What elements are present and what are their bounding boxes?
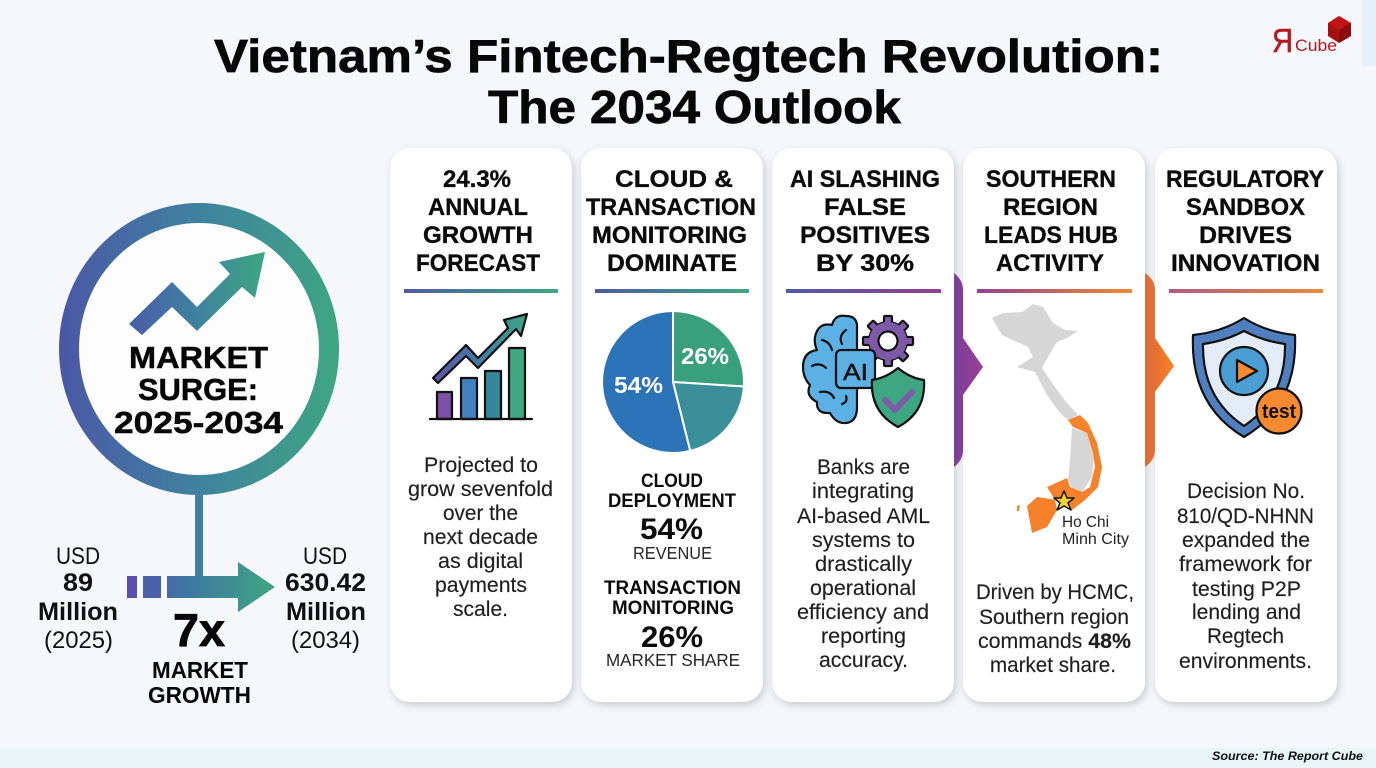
map: Vietnam: Ho Chi — [1062, 514, 1109, 531]
text: testing P2P — [1192, 578, 1301, 601]
panel: AI slashing false positives — [772, 148, 954, 702]
text: Decision No. — [1187, 480, 1305, 503]
end value: USD — [303, 543, 347, 570]
text: payments — [435, 574, 527, 597]
text: next decade — [423, 526, 538, 549]
text — [976, 581, 1134, 677]
transaction monitoring stat: MONITORING — [612, 598, 734, 619]
map: Vietnam: Minh City — [1062, 531, 1129, 548]
7x market growth — [148, 604, 251, 708]
cloud deployment stat: DEPLOYMENT — [608, 491, 736, 512]
heading: INNOVATION — [1171, 250, 1320, 277]
start value: USD — [56, 543, 100, 570]
heading: AI SLASHING — [790, 166, 940, 193]
arrow: orange tab — [1145, 273, 1174, 467]
text: 810/QD-NHNN — [1177, 505, 1314, 528]
text: commands 48% — [978, 630, 1131, 653]
start value — [38, 543, 118, 654]
heading: BY 30% — [816, 250, 914, 277]
text: scale. — [453, 598, 508, 621]
heading: ACTIVITY — [996, 250, 1104, 277]
icon: AI brain, gear and shield — [803, 316, 924, 427]
heading — [416, 166, 540, 277]
heading: REGION — [1003, 194, 1098, 221]
ring label — [114, 340, 284, 440]
heading: TRANSACTION — [586, 194, 756, 221]
text — [1177, 480, 1314, 673]
heading: FALSE — [824, 194, 906, 221]
map: Vietnam — [992, 304, 1129, 548]
heading: CLOUD & — [615, 166, 733, 193]
panel: market surge — [38, 213, 366, 708]
title: The 2034 Outlook — [488, 81, 901, 133]
cloud deployment stat: CLOUD — [641, 471, 703, 492]
text: AI-based AML — [797, 505, 930, 528]
heading — [790, 166, 940, 277]
text: framework for — [1179, 553, 1312, 576]
text: reporting — [821, 625, 906, 648]
7x market growth: 7x — [173, 604, 225, 656]
heading: DOMINATE — [607, 250, 737, 277]
title — [214, 30, 1163, 133]
logo: RCube: Cube — [1295, 36, 1337, 55]
heading: ANNUAL — [428, 194, 528, 221]
text: Projected to — [424, 454, 538, 477]
panel: southern region leads hub activity — [963, 148, 1145, 702]
text: market share. — [990, 654, 1116, 677]
heading: 24.3% — [443, 166, 511, 193]
text: accuracy. — [819, 649, 908, 672]
text: over the — [443, 502, 518, 525]
heading: FORECAST — [416, 250, 540, 277]
heading: DRIVES — [1199, 222, 1292, 249]
ring label: 2025-2034 — [114, 405, 284, 440]
pie chart: 54% — [614, 372, 663, 398]
panel: regulatory sandbox drives innovation — [1155, 148, 1337, 702]
ring label: SURGE: — [138, 372, 258, 407]
pie chart — [602, 311, 744, 453]
text: grow sevenfold — [408, 478, 553, 501]
panel: annual growth forecast — [390, 148, 572, 702]
text: operational — [810, 577, 916, 600]
start value: (2025) — [44, 627, 113, 654]
text: as digital — [438, 550, 523, 573]
text: Regtech — [1207, 625, 1284, 648]
cloud deployment stat: 54% — [640, 513, 703, 546]
text — [797, 456, 930, 672]
growth arrow — [127, 495, 275, 612]
title: Vietnam’s Fintech-Regtech Revolution: — [214, 30, 1163, 82]
heading — [984, 166, 1118, 277]
text: Banks are — [817, 456, 910, 479]
icon: AI brain, gear and shield: AI — [843, 359, 868, 385]
ring label: MARKET — [129, 340, 268, 375]
start value: 89 — [63, 569, 93, 597]
text: Southern region — [979, 606, 1129, 629]
logo: RCube — [1272, 16, 1351, 59]
text: expanded the — [1182, 529, 1310, 552]
heading: GROWTH — [423, 222, 533, 249]
text: efficiency and — [797, 601, 929, 624]
logo: RCube: Я — [1272, 22, 1293, 59]
heading: REGULATORY — [1166, 166, 1324, 193]
arrow: purple tab — [954, 273, 983, 467]
ring with trend arrow — [69, 213, 329, 485]
7x market growth: GROWTH — [148, 682, 251, 708]
icon: shield with test badge: test — [1262, 401, 1296, 423]
heading — [586, 166, 756, 277]
end value: Million — [286, 598, 366, 626]
cloud deployment stat: REVENUE — [633, 543, 712, 563]
transaction monitoring stat: TRANSACTION — [604, 578, 741, 599]
heading: SOUTHERN — [986, 166, 1116, 193]
start value: Million — [38, 598, 118, 626]
cloud deployment stat — [608, 471, 736, 563]
heading: POSITIVES — [800, 222, 930, 249]
transaction monitoring stat: 26% — [641, 621, 703, 654]
text: lending and — [1192, 601, 1301, 624]
transaction monitoring stat — [604, 578, 741, 670]
icon: bar chart with arrow — [430, 314, 532, 419]
source: Source: The Report Cube — [1212, 749, 1363, 763]
icon: shield with test badge — [1193, 318, 1302, 437]
text: systems to — [812, 529, 915, 552]
text: Driven by HCMC, — [976, 581, 1134, 604]
transaction monitoring stat: MARKET SHARE — [606, 650, 740, 670]
text — [408, 454, 553, 621]
7x market growth: MARKET — [152, 657, 248, 683]
heading: SANDBOX — [1186, 194, 1305, 221]
heading: MONITORING — [592, 222, 747, 249]
text: environments. — [1179, 650, 1312, 673]
text: drastically — [815, 553, 913, 576]
panel: cloud and transaction monitoring — [581, 148, 763, 702]
text: integrating — [812, 480, 914, 503]
end value — [285, 543, 366, 654]
end value: (2034) — [291, 627, 360, 654]
end value: 630.42 — [285, 569, 366, 597]
heading — [1166, 166, 1324, 277]
heading: LEADS HUB — [984, 222, 1118, 249]
pie chart: 26% — [681, 343, 729, 369]
